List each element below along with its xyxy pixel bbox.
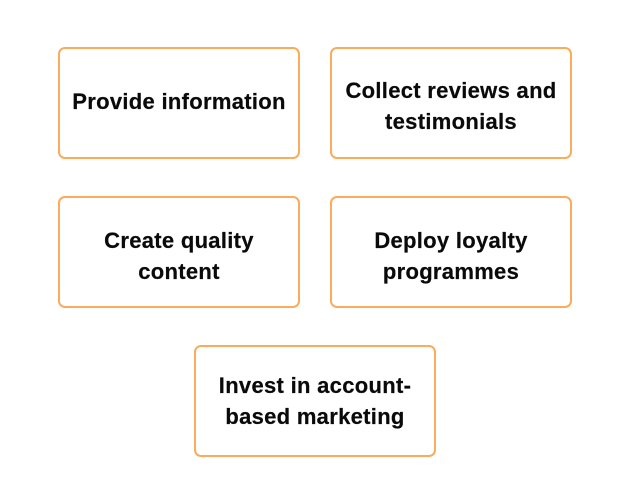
card: Create quality content <box>58 196 300 308</box>
label: Provide information: Provide information <box>72 89 286 114</box>
label: Collect reviews and testimonials: testimonials <box>385 109 517 134</box>
card: Provide information <box>58 47 300 159</box>
label: Create quality content: Create quality <box>104 228 254 253</box>
label: Invest in account-based marketing: Invest in account- <box>219 373 411 398</box>
label: Deploy loyalty programmes: programmes <box>383 259 519 284</box>
label: Collect reviews and testimonials <box>345 78 557 134</box>
card: Deploy loyalty programmes <box>330 196 572 308</box>
label: Collect reviews and testimonials: Collect reviews and <box>345 78 557 103</box>
label: Deploy loyalty programmes <box>374 228 528 284</box>
card: Collect reviews and testimonials <box>330 47 572 159</box>
card: Invest in account-based marketing <box>194 345 436 457</box>
label: Invest in account-based marketing: based marketing <box>225 404 405 429</box>
label: Create quality content: content <box>138 259 220 284</box>
label: Deploy loyalty programmes: Deploy loyalty <box>374 228 528 253</box>
label: Create quality content <box>104 228 254 284</box>
label: Invest in account-based marketing <box>219 373 411 429</box>
